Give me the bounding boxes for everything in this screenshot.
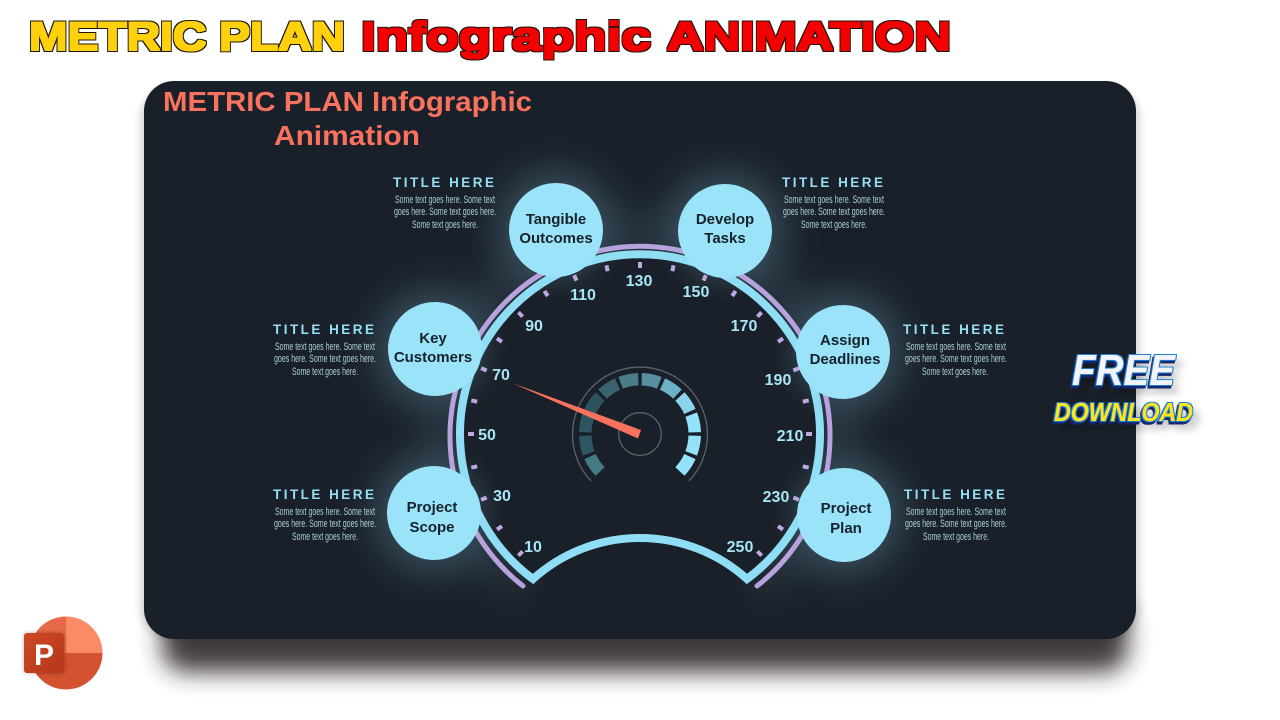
node: Project Plan: Plan <box>830 520 862 537</box>
node: Key Customers: Customers <box>394 349 472 366</box>
free download badge <box>1054 346 1193 427</box>
gauge interior glow <box>466 262 813 531</box>
panel heading <box>163 86 532 151</box>
text block: middle left: goes here. Some text goes here. <box>274 353 376 365</box>
text block: middle right: TITLE HERE <box>903 322 1004 337</box>
panel heading: METRIC PLAN Infographic <box>163 86 532 117</box>
gauge scale numbers: 130 <box>626 273 652 290</box>
gauge scale numbers: 10 <box>524 539 542 556</box>
free download badge: DOWNLOAD <box>1054 397 1193 427</box>
text block: middle left: TITLE HERE <box>273 322 374 337</box>
text block: top right: TITLE HERE <box>782 175 883 190</box>
free download badge: FREE <box>1072 346 1176 395</box>
node: Tangible Outcomes: Outcomes <box>519 230 593 247</box>
gauge scale numbers: 250 <box>727 539 753 556</box>
node: Develop Tasks: Tasks <box>704 230 746 247</box>
text block: bottom right: goes here. Some text goes here. <box>905 518 1007 530</box>
node: Project Scope <box>387 466 481 560</box>
node: Key Customers <box>388 302 482 396</box>
panel: dark slide <box>144 81 1136 639</box>
text block: middle right: Some text goes here. Some text <box>906 341 1006 353</box>
text block: top left <box>393 175 496 231</box>
icon: PowerPoint logo <box>24 616 104 691</box>
gauge scale numbers: 110 <box>570 287 596 304</box>
node: Develop Tasks <box>678 184 772 278</box>
gauge scale numbers: 230 <box>763 489 789 506</box>
text block: top right <box>782 175 885 231</box>
text block: bottom right: Some text goes here. Some text <box>906 506 1006 518</box>
text block: bottom right: Some text goes here. <box>923 531 989 543</box>
gauge outer purple arc <box>450 246 830 586</box>
node: Assign Deadlines: Deadlines <box>810 351 880 368</box>
node: Assign Deadlines <box>796 305 890 399</box>
node: Key Customers: Key <box>419 330 447 347</box>
main title: ANIMATION <box>667 15 951 59</box>
text block: bottom left: goes here. Some text goes here. <box>274 518 376 530</box>
text block: bottom left: Some text goes here. Some text <box>275 506 375 518</box>
text block: top left: Some text goes here. Some text <box>395 194 495 206</box>
gauge needle <box>513 383 641 438</box>
gauge glow <box>376 172 902 586</box>
icon: PowerPoint logo: P <box>34 639 54 672</box>
panel heading: Animation <box>274 120 420 151</box>
text block: bottom right: TITLE HERE <box>904 487 1005 502</box>
text block: top left: goes here. Some text goes here. <box>394 206 496 218</box>
node: Project Plan <box>797 468 891 562</box>
gauge scale numbers <box>478 273 803 556</box>
gauge scale numbers: 170 <box>731 318 757 335</box>
text block: bottom left <box>273 487 376 543</box>
inner dial thin arc <box>573 367 708 481</box>
text block: top right: Some text goes here. Some text <box>784 194 884 206</box>
node: Project Scope: Project <box>407 499 457 516</box>
main title <box>29 15 951 59</box>
gauge scale numbers: 190 <box>765 372 791 389</box>
text block: top left: Some text goes here. <box>412 219 478 231</box>
node: Assign Deadlines: Assign <box>820 332 870 349</box>
text block: bottom right <box>904 487 1007 543</box>
gauge scale numbers: 90 <box>525 318 543 335</box>
text block: middle right <box>903 322 1007 378</box>
text block: top right: goes here. Some text goes here. <box>783 206 885 218</box>
text block: middle right: goes here. Some text goes here. <box>905 353 1007 365</box>
gauge interior <box>460 254 820 579</box>
gauge scale numbers: 150 <box>683 284 709 301</box>
gauge tick marks <box>468 262 812 556</box>
text block: middle right: Some text goes here. <box>922 366 988 378</box>
main title: Infographic <box>361 15 651 59</box>
gauge scale numbers: 30 <box>493 488 511 505</box>
gauge cyan frame <box>460 254 820 579</box>
node: Tangible Outcomes <box>509 183 603 277</box>
gauge scale numbers: 50 <box>478 427 496 444</box>
text block: middle left: Some text goes here. <box>292 366 358 378</box>
inner dial hub ring <box>619 413 661 455</box>
text block: middle left <box>273 322 376 378</box>
main title: METRIC PLAN <box>29 15 345 59</box>
node: Project Scope: Scope <box>409 519 455 536</box>
text block: top left: TITLE HERE <box>393 175 494 190</box>
inner dial segments <box>585 379 695 472</box>
text block: top right: Some text goes here. <box>801 219 867 231</box>
node: Develop Tasks: Develop <box>696 211 754 228</box>
node: Project Plan: Project <box>821 500 871 517</box>
node: Tangible Outcomes: Tangible <box>526 211 586 228</box>
gauge scale numbers: 70 <box>492 367 510 384</box>
text block: bottom left: Some text goes here. <box>292 531 358 543</box>
text block: middle left: Some text goes here. Some text <box>275 341 375 353</box>
gauge scale numbers: 210 <box>777 428 803 445</box>
text block: bottom left: TITLE HERE <box>273 487 374 502</box>
panel shadow <box>140 88 1140 672</box>
